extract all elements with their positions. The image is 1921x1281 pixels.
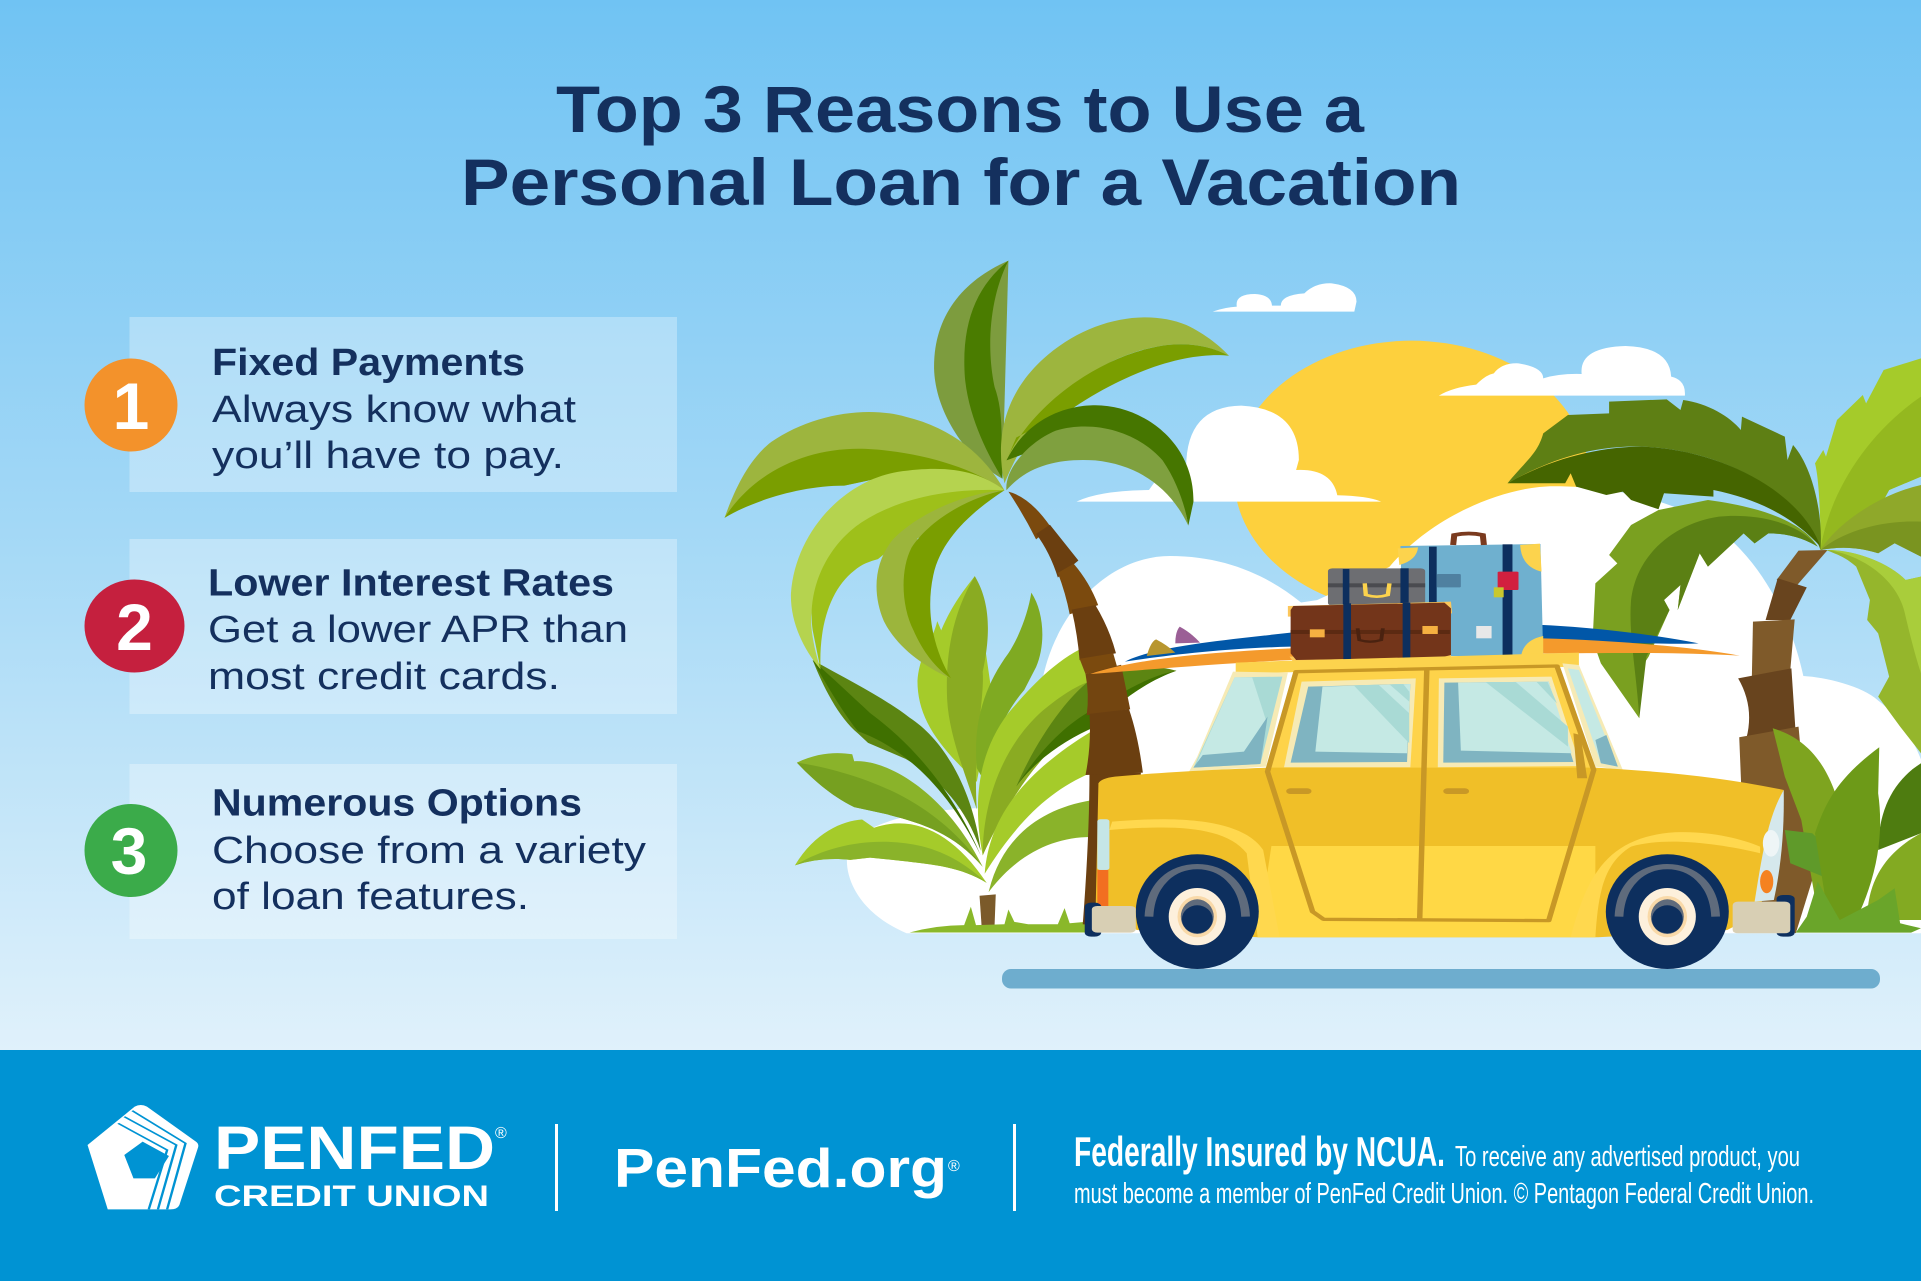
website: ® (948, 1158, 960, 1175)
panel: reasons list (84, 317, 677, 939)
road (1002, 969, 1880, 988)
title: Top 3 Reasons to Use a (556, 72, 1365, 146)
car roof (1236, 653, 1579, 673)
reason 2: lower interest rates: Get a lower APR than (208, 609, 628, 651)
white hills (847, 486, 1921, 933)
reason 2: lower interest rates: 2 (116, 590, 153, 664)
logo wordmark: CREDIT UNION (214, 1180, 489, 1213)
title: Personal Loan for a Vacation (461, 145, 1461, 219)
front side window (1562, 663, 1623, 770)
suitcase: brown (1288, 602, 1452, 662)
clouds (1076, 283, 1685, 502)
door window left (1284, 678, 1416, 767)
surfboards (1090, 625, 1740, 674)
door handles and mirror (1286, 733, 1587, 794)
palm frond: lower right (1826, 550, 1921, 753)
sun (1234, 341, 1589, 613)
headlight (1755, 790, 1784, 902)
left plant and palm (725, 261, 1229, 932)
reason 1: fixed payments: Always know what (212, 389, 577, 431)
doors outline (1268, 666, 1594, 921)
divider (1013, 1124, 1016, 1211)
logo wordmark: ® (495, 1125, 507, 1142)
logo wordmark (214, 1114, 507, 1213)
cabin (1266, 665, 1595, 772)
divider (555, 1124, 558, 1211)
car body (1096, 768, 1784, 937)
reason 1: fixed payments: 1 (113, 369, 149, 443)
reason 2: lower interest rates (84, 539, 677, 714)
plant leaves (795, 576, 1176, 892)
right palm upper fronds (1508, 358, 1921, 557)
reason 3: numerous options: Numerous Options (212, 782, 582, 824)
suitcase: blue (1398, 533, 1543, 656)
plant stem (980, 894, 996, 925)
right plant leaves (1773, 728, 1921, 933)
rear wheel (1136, 854, 1259, 969)
reason 1: fixed payments: Fixed Payments (212, 342, 525, 384)
rear side window (1189, 672, 1288, 772)
palm trunk (1008, 492, 1143, 929)
palm fronds (725, 261, 1229, 679)
grass (910, 907, 1086, 932)
illustration: beach scene (725, 261, 1921, 988)
reason 3: numerous options: 3 (111, 814, 147, 888)
bumpers (1085, 895, 1795, 937)
door window right (1438, 677, 1581, 767)
website: PenFed.org (614, 1137, 947, 1199)
reason 3: numerous options: of loan features. (212, 876, 529, 918)
disclosure text: Federally Insured by NCUA. (1074, 1128, 1445, 1175)
reason 1: fixed payments (84, 317, 677, 492)
front wheel (1606, 854, 1729, 969)
suitcase: gray (1328, 568, 1425, 606)
palm frond: lower left (1593, 500, 1818, 718)
right palm and plant (1593, 500, 1921, 933)
car with luggage (1085, 533, 1795, 969)
reason 1: fixed payments: you’ll have to pay. (212, 435, 564, 477)
footer bar (0, 1050, 1921, 1281)
tail light (1097, 819, 1109, 907)
logo wordmark: PENFED (214, 1114, 495, 1182)
reason 2: lower interest rates: most credit cards. (208, 656, 560, 698)
reason 2: lower interest rates: Lower Interest Rates (208, 562, 614, 604)
logo mark (88, 1105, 198, 1209)
palm trunk (1738, 550, 1828, 933)
reason 3: numerous options: Choose from a variety (212, 830, 646, 872)
title (461, 72, 1461, 219)
disclosure text (1074, 1128, 1814, 1210)
reason 3: numerous options (84, 764, 677, 939)
